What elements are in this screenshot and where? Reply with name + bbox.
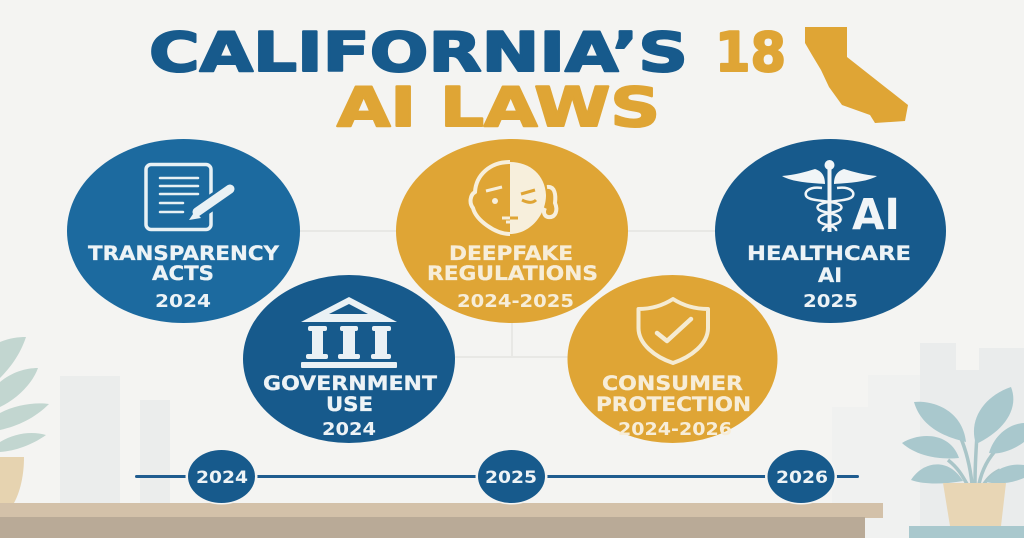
title line one: CALIFORNIA’S [149,21,688,84]
title line two: AI LAWS [337,76,660,139]
icon: half face [471,162,556,234]
year: 2024-2026 [618,419,732,440]
panel: deepfake regulations [396,139,628,323]
left plant [0,337,49,503]
label: HEALTHCARE [747,242,911,265]
panel: government use: USE [326,393,373,416]
background buildings right [832,343,1024,538]
title number: 18 [715,21,786,84]
left pot [0,457,24,503]
timeline marker 2025 [476,448,548,504]
year: 2024-2025 [457,291,574,312]
background buildings left [60,376,170,504]
icon: caduceus with AI: AI [852,190,900,240]
panel: deepfake regulations: REGULATIONS [427,262,598,285]
icon: shield with check [638,299,708,363]
timeline marker 2026: 2026 [776,468,828,488]
timeline marker 2024: 2024 [196,468,248,488]
year: 2025 [803,291,858,312]
panel: healthcare AI [715,139,946,323]
panel: consumer protection: PROTECTION [596,393,751,416]
panel: transparency acts: ACTS [152,262,214,285]
right plant [902,387,1024,538]
panel: consumer protection [568,275,778,443]
icon: California map [805,27,908,123]
timeline [135,448,859,504]
panel: government use [243,275,455,443]
right pot [943,483,1006,526]
timeline marker 2025: 2025 [485,468,537,488]
label: TRANSPARENCY [88,242,280,265]
timeline marker 2026 [765,448,837,504]
icon: caduceus with AI [782,160,900,240]
panel: healthcare AI: AI [818,264,842,287]
shelf [0,503,883,538]
panel: transparency acts [67,139,300,323]
label: CONSUMER [602,372,743,395]
icon: document and pencil [146,164,232,230]
title [149,21,786,139]
right pot stand [909,526,1024,538]
label: GOVERNMENT [263,372,438,395]
label: DEEPFAKE [449,242,573,265]
timeline marker 2024 [186,448,258,504]
icon: government building [301,297,397,368]
year: 2024 [155,291,211,312]
year: 2024 [322,419,376,440]
